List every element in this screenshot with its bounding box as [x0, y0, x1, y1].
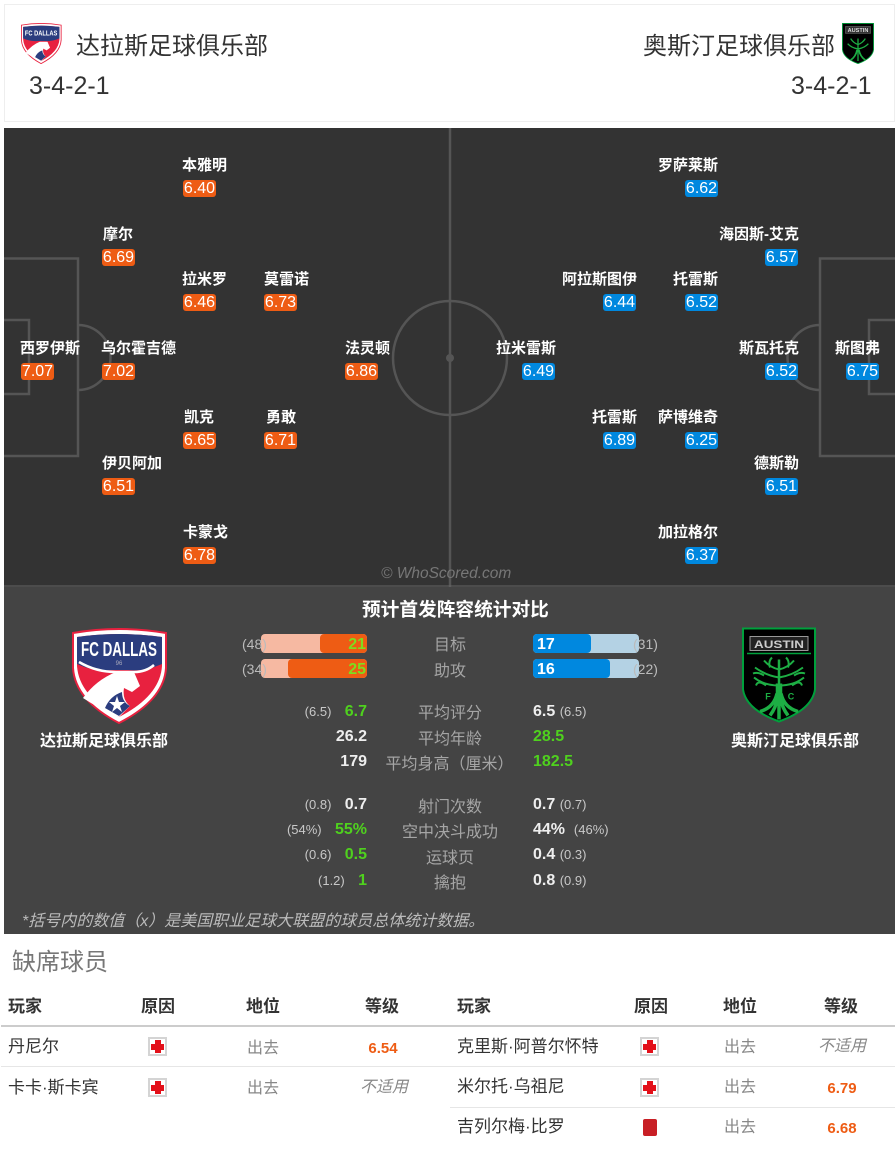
label: tackles: 擒抱	[434, 875, 466, 892]
away value: rating: 6.5 (6.5)	[533, 703, 586, 720]
player: 摩尔	[102, 226, 135, 266]
player: 斯瓦托克	[739, 340, 799, 380]
bar: home goals	[242, 634, 367, 653]
home value: dribbles: (0.6) 0.5	[305, 846, 367, 863]
player: 本雅明	[182, 157, 227, 197]
label: dribbles: 运球页	[426, 850, 474, 867]
bar: away assists: 16	[537, 661, 555, 678]
label: aerial duels: 空中决斗成功	[402, 824, 498, 841]
player: 拉米雷斯: 拉米雷斯	[496, 340, 556, 357]
table header: 等级	[365, 997, 399, 1016]
player: 拉米罗: 拉米罗	[182, 271, 227, 288]
player: 法灵顿: 法灵顿	[345, 340, 390, 357]
icon: Austin FC large crest: F	[765, 692, 771, 702]
heading: missing players: 缺席球员	[12, 949, 108, 976]
table header: 玩家	[457, 997, 491, 1016]
row: 吉列尔梅·比罗: 出去	[724, 1119, 756, 1136]
away value: aerial duels: 44% (46%)	[533, 821, 609, 838]
row: 卡卡·斯卡宾	[0, 1068, 450, 1107]
home value: aerial duels: (54%) 55%	[287, 821, 367, 838]
player: 罗萨莱斯: 6.62	[686, 180, 717, 197]
table header: 等级	[824, 997, 858, 1016]
icon: FC Dallas large crest: 96	[116, 661, 123, 667]
row: 丹尼尔: 出去	[247, 1040, 279, 1057]
icon: Austin FC large crest: AUSTIN	[754, 639, 804, 651]
player: 萨博维奇: 萨博维奇	[658, 409, 718, 426]
row: 丹尼尔	[0, 1027, 450, 1066]
label: shots: 射门次数	[418, 799, 482, 816]
row: 克里斯·阿普尔怀特: 克里斯·阿普尔怀特	[457, 1037, 599, 1056]
away team label: 奥斯汀足球俱乐部	[731, 733, 859, 750]
row: 吉列尔梅·比罗	[450, 1108, 895, 1147]
player: 法灵顿: 6.86	[346, 363, 377, 380]
player: 乌尔霍吉德: 7.02	[103, 363, 134, 380]
icon: injury	[640, 1037, 659, 1056]
player: 托雷斯: 6.89	[604, 432, 635, 449]
label: average rating: 平均评分	[418, 705, 482, 722]
table header: 原因	[141, 997, 175, 1016]
icon: injury	[148, 1078, 167, 1097]
icon: FC Dallas large crest	[72, 628, 167, 724]
home team name: 达拉斯足球俱乐部	[76, 33, 268, 60]
player: 拉米雷斯	[496, 340, 556, 380]
row: 克里斯·阿普尔怀特: 不适用	[818, 1038, 866, 1055]
home value: rating: (6.5) 6.7	[305, 703, 367, 720]
table header: 地位	[246, 997, 280, 1016]
player: 德斯勒	[754, 455, 799, 495]
icon: Austin FC small crest: AUSTIN	[848, 28, 868, 34]
players: FC Dallas	[20, 157, 390, 564]
player: 卡蒙戈: 卡蒙戈	[183, 524, 228, 541]
table header: 原因	[634, 997, 668, 1016]
player: 加拉格尔: 6.37	[686, 547, 717, 564]
player: 西罗伊斯	[20, 340, 80, 380]
row: 米尔托·乌祖尼: 米尔托·乌祖尼	[457, 1077, 565, 1096]
table: home missing players	[0, 990, 450, 1110]
player: 斯图弗: 6.75	[847, 363, 878, 380]
player: 托雷斯: 托雷斯	[592, 409, 637, 426]
home value: height: 179	[340, 753, 367, 770]
away value: tackles: 0.8 (0.9)	[533, 872, 586, 889]
icon: injury	[148, 1037, 167, 1056]
player: 海因斯-艾克: 海因斯-艾克	[719, 226, 799, 243]
row: 卡卡·斯卡宾: 卡卡·斯卡宾	[8, 1078, 99, 1097]
footnote: *括号内的数值（x）是美国职业足球大联盟的球员总体统计数据。	[22, 913, 484, 930]
player: 托雷斯: 托雷斯	[673, 271, 718, 288]
player: 斯瓦托克: 斯瓦托克	[739, 340, 799, 357]
row: 吉列尔梅·比罗: 6.68	[827, 1120, 857, 1137]
player: 德斯勒: 6.51	[766, 478, 797, 495]
player: 阿拉斯图伊	[562, 271, 637, 311]
player: 海因斯-艾克	[719, 226, 799, 266]
row: 克里斯·阿普尔怀特	[450, 1027, 895, 1066]
home value: shots: (0.8) 0.7	[305, 796, 367, 813]
player: 托雷斯	[592, 409, 637, 449]
player: 阿拉斯图伊: 阿拉斯图伊	[562, 271, 637, 288]
icon: Austin FC large crest	[742, 628, 816, 722]
away value: shots: 0.7 (0.7)	[533, 796, 586, 813]
away value: dribbles: 0.4 (0.3)	[533, 846, 586, 863]
table: away missing players	[450, 990, 895, 1150]
player: 摩尔: 6.69	[103, 249, 134, 266]
away team name: 奥斯汀足球俱乐部	[643, 33, 835, 60]
player: 萨博维奇	[658, 409, 718, 449]
player: 海因斯-艾克: 6.57	[766, 249, 797, 266]
player: 勇敢: 勇敢	[266, 409, 296, 426]
player: 斯瓦托克: 6.52	[766, 363, 797, 380]
player: 乌尔霍吉德: 乌尔霍吉德	[101, 340, 176, 357]
player: 托雷斯	[673, 271, 718, 311]
label: assists: 助攻	[434, 663, 466, 680]
icon: red card	[643, 1119, 657, 1136]
home formation: 3-4-2-1	[29, 72, 110, 100]
bar: home assists: (34)	[242, 661, 267, 677]
player: 拉米雷斯: 6.49	[523, 363, 554, 380]
bar: home goals: (48)	[242, 636, 267, 652]
bar: away assists	[533, 659, 658, 678]
player: 斯图弗: 斯图弗	[835, 340, 880, 357]
icon: Austin FC large crest: C	[788, 692, 795, 702]
row: 吉列尔梅·比罗: 吉列尔梅·比罗	[457, 1117, 565, 1136]
player: 加拉格尔	[658, 524, 718, 564]
player: 伊贝阿加	[102, 455, 162, 495]
player: 加拉格尔: 加拉格尔	[658, 524, 718, 541]
player: 伊贝阿加: 6.51	[103, 478, 134, 495]
player: 本雅明: 本雅明	[182, 157, 227, 174]
row: 克里斯·阿普尔怀特: 出去	[724, 1039, 756, 1056]
bar: home assists	[242, 659, 367, 678]
pitch markings	[4, 128, 895, 587]
player: 本雅明: 6.40	[184, 180, 215, 197]
player: 卡蒙戈	[183, 524, 228, 564]
player: 卡蒙戈: 6.78	[184, 547, 215, 564]
icon: injury	[640, 1078, 659, 1097]
player: 拉米罗: 6.46	[184, 294, 215, 311]
player: 拉米罗	[182, 271, 227, 311]
panel: lineup stats comparison	[4, 587, 895, 934]
player: 凯克	[183, 409, 216, 449]
player: 莫雷诺: 莫雷诺	[264, 271, 309, 288]
row: 丹尼尔: 丹尼尔	[8, 1037, 59, 1056]
player: 西罗伊斯: 7.07	[22, 363, 53, 380]
label: average height: 平均身高（厘米）	[385, 756, 514, 773]
player: 莫雷诺: 6.73	[265, 294, 296, 311]
player: 西罗伊斯: 西罗伊斯	[20, 340, 80, 357]
home value: age: 26.2	[336, 728, 367, 745]
label: average age: 平均年龄	[418, 731, 482, 748]
bar: home goals: 21	[348, 636, 366, 653]
table header	[450, 990, 895, 1027]
player: 勇敢: 6.71	[265, 432, 296, 449]
players: Austin FC	[496, 157, 880, 564]
away value: age: 28.5	[533, 728, 564, 745]
player: 斯图弗	[835, 340, 880, 380]
player: 莫雷诺	[264, 271, 309, 311]
player: 罗萨莱斯	[658, 157, 718, 197]
bar: home assists: 25	[348, 661, 366, 678]
row: 卡卡·斯卡宾: 不适用	[360, 1079, 408, 1096]
bar: away goals	[533, 634, 658, 653]
label: goals: 目标	[434, 637, 466, 654]
player: 凯克: 6.65	[184, 432, 215, 449]
away formation: 3-4-2-1	[791, 72, 872, 100]
home team label: 达拉斯足球俱乐部	[40, 733, 168, 750]
player: 阿拉斯图伊: 6.44	[604, 294, 635, 311]
bar: away goals: (31)	[633, 636, 658, 652]
away value: height: 182.5	[533, 753, 573, 770]
player: 摩尔: 摩尔	[103, 226, 133, 243]
player: 乌尔霍吉德	[101, 340, 176, 380]
stats title: 预计首发阵容统计对比	[362, 599, 549, 620]
player: 伊贝阿加: 伊贝阿加	[102, 455, 162, 472]
row: 丹尼尔: 6.54	[368, 1040, 398, 1057]
player: 凯克: 凯克	[184, 409, 214, 426]
bar: away goals: 17	[537, 636, 555, 653]
player: 萨博维奇: 6.25	[686, 432, 717, 449]
bar: away assists: (22)	[633, 661, 658, 677]
player: 罗萨莱斯: 罗萨莱斯	[658, 157, 718, 174]
player: 托雷斯: 6.52	[686, 294, 717, 311]
icon: Austin FC small crest	[842, 23, 874, 64]
row: 卡卡·斯卡宾: 出去	[247, 1080, 279, 1097]
player: 勇敢	[264, 409, 297, 449]
home value: tackles: (1.2) 1	[318, 872, 367, 889]
row: 米尔托·乌祖尼: 出去	[724, 1079, 756, 1096]
watermark: © WhoScored.com	[381, 565, 511, 582]
table header	[0, 990, 450, 1027]
icon: FC Dallas small crest	[21, 23, 62, 64]
row: 米尔托·乌祖尼: 6.79	[827, 1080, 857, 1097]
table header: 地位	[723, 997, 757, 1016]
row: 米尔托·乌祖尼	[450, 1068, 895, 1107]
player: 法灵顿	[345, 340, 390, 380]
table header: 玩家	[8, 997, 42, 1016]
player: 德斯勒: 德斯勒	[754, 455, 799, 472]
header card	[4, 4, 895, 122]
pitch panel	[4, 128, 895, 587]
